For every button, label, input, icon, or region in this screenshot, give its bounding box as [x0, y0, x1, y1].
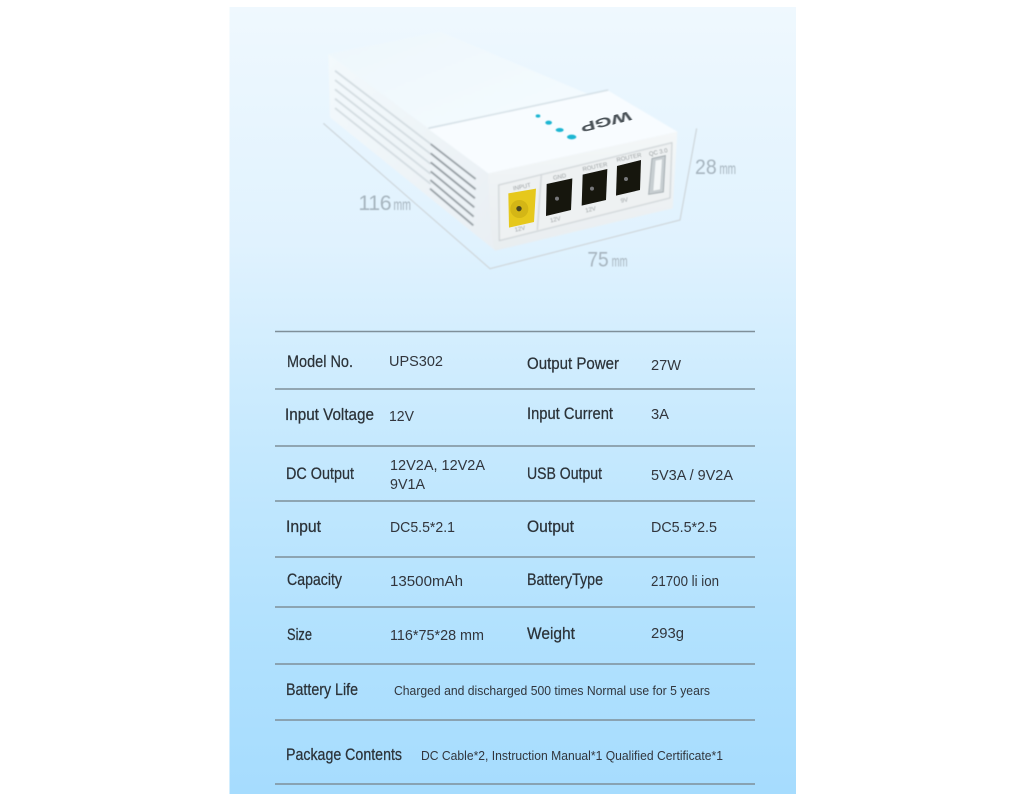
input port yellow	[508, 189, 536, 228]
top seam	[428, 90, 608, 128]
output port 3	[616, 160, 641, 196]
dimension: 28 mm	[695, 155, 736, 179]
row: DC and USB output: 12V2A, 12V2A	[390, 457, 485, 474]
row: input voltage and current: 3A	[651, 406, 669, 423]
dimension lines	[323, 123, 697, 269]
dimension: 75 mm: 75	[587, 248, 609, 272]
row: input voltage and current	[285, 404, 669, 425]
port panel outline	[499, 143, 672, 241]
dimension: 75 mm	[587, 248, 628, 272]
row: capacity and battery type: 13500mAh	[390, 573, 463, 590]
row: model and output power: 27W	[651, 357, 682, 374]
top surface	[328, 32, 677, 173]
top front section	[428, 91, 677, 173]
output port 1	[546, 178, 572, 216]
row: DC and USB output: DC Output	[286, 464, 354, 483]
port labels: 9V	[620, 197, 629, 205]
device body	[328, 32, 677, 251]
dimension: 28 mm: mm	[719, 161, 736, 178]
port labels: ROUTER	[616, 153, 643, 164]
port labels: INPUT	[513, 183, 532, 192]
port labels: QC 3.0	[649, 148, 669, 158]
row: battery life: Battery Life	[286, 680, 358, 699]
USB port	[649, 156, 665, 194]
row: package contents: DC Cable*2, Instruction Manual*1 Qualified Certificate*1	[421, 748, 723, 763]
row: input voltage and current: Input Current	[527, 404, 613, 423]
row: size and weight	[287, 624, 684, 644]
port labels: 12V	[550, 216, 561, 224]
dimension: 116 mm: mm	[393, 197, 411, 214]
row: size and weight: Weight	[527, 624, 575, 643]
row: input and output connectors: Input	[286, 517, 321, 536]
row: battery life: Charged and discharged 500 times Normal use for 5 years	[394, 683, 710, 698]
vents dark	[430, 144, 476, 225]
dimension: 116 mm: 116	[358, 191, 392, 215]
specification table	[275, 332, 755, 784]
row: DC and USB output: USB Output	[527, 464, 602, 483]
row: input and output connectors: DC5.5*2.5	[651, 519, 717, 536]
port labels: 12V	[514, 226, 526, 234]
output port 2	[582, 169, 607, 206]
port labels: 12V	[585, 206, 597, 214]
row: battery life	[286, 680, 710, 699]
dimension: 116 mm	[358, 191, 411, 215]
row: input voltage and current: Input Voltage	[285, 405, 374, 424]
port labels	[513, 148, 669, 234]
row: model and output power: UPS302	[389, 353, 443, 370]
row: size and weight: Size	[287, 625, 312, 644]
row: capacity and battery type	[287, 570, 719, 590]
row: capacity and battery type: Capacity	[287, 570, 342, 589]
row: DC and USB output: 9V1A	[390, 476, 425, 493]
logo: WGP	[579, 108, 633, 135]
row: package contents	[286, 745, 723, 764]
row: package contents: Package Contents	[286, 745, 402, 764]
status LEDs	[536, 114, 576, 139]
row: capacity and battery type: BatteryType	[527, 570, 603, 589]
row: model and output power: Output Power	[527, 354, 619, 373]
row: input and output connectors: DC5.5*2.1	[390, 519, 455, 536]
vents light	[335, 71, 431, 184]
row: input voltage and current: 12V	[389, 408, 414, 425]
front face	[488, 132, 677, 251]
row: DC and USB output: 5V3A / 9V2A	[651, 467, 733, 484]
dimension: 75 mm: mm	[612, 254, 628, 271]
row: size and weight: 116*75*28 mm	[390, 627, 484, 644]
left side with vents	[328, 54, 495, 251]
row: input and output connectors: Output	[527, 517, 574, 536]
background panel	[230, 7, 796, 794]
product illustration with dimensions	[323, 32, 736, 272]
row: capacity and battery type: 21700 li ion	[651, 573, 719, 590]
port labels: ROUTER	[582, 162, 609, 173]
row: size and weight: 293g	[651, 625, 684, 642]
row: DC and USB output	[286, 457, 733, 493]
dimension: 28 mm: 28	[695, 155, 717, 179]
row: model and output power	[287, 352, 682, 374]
row: input and output connectors	[286, 517, 717, 536]
row: model and output power: Model No.	[287, 352, 353, 371]
port labels: GND	[553, 173, 568, 182]
